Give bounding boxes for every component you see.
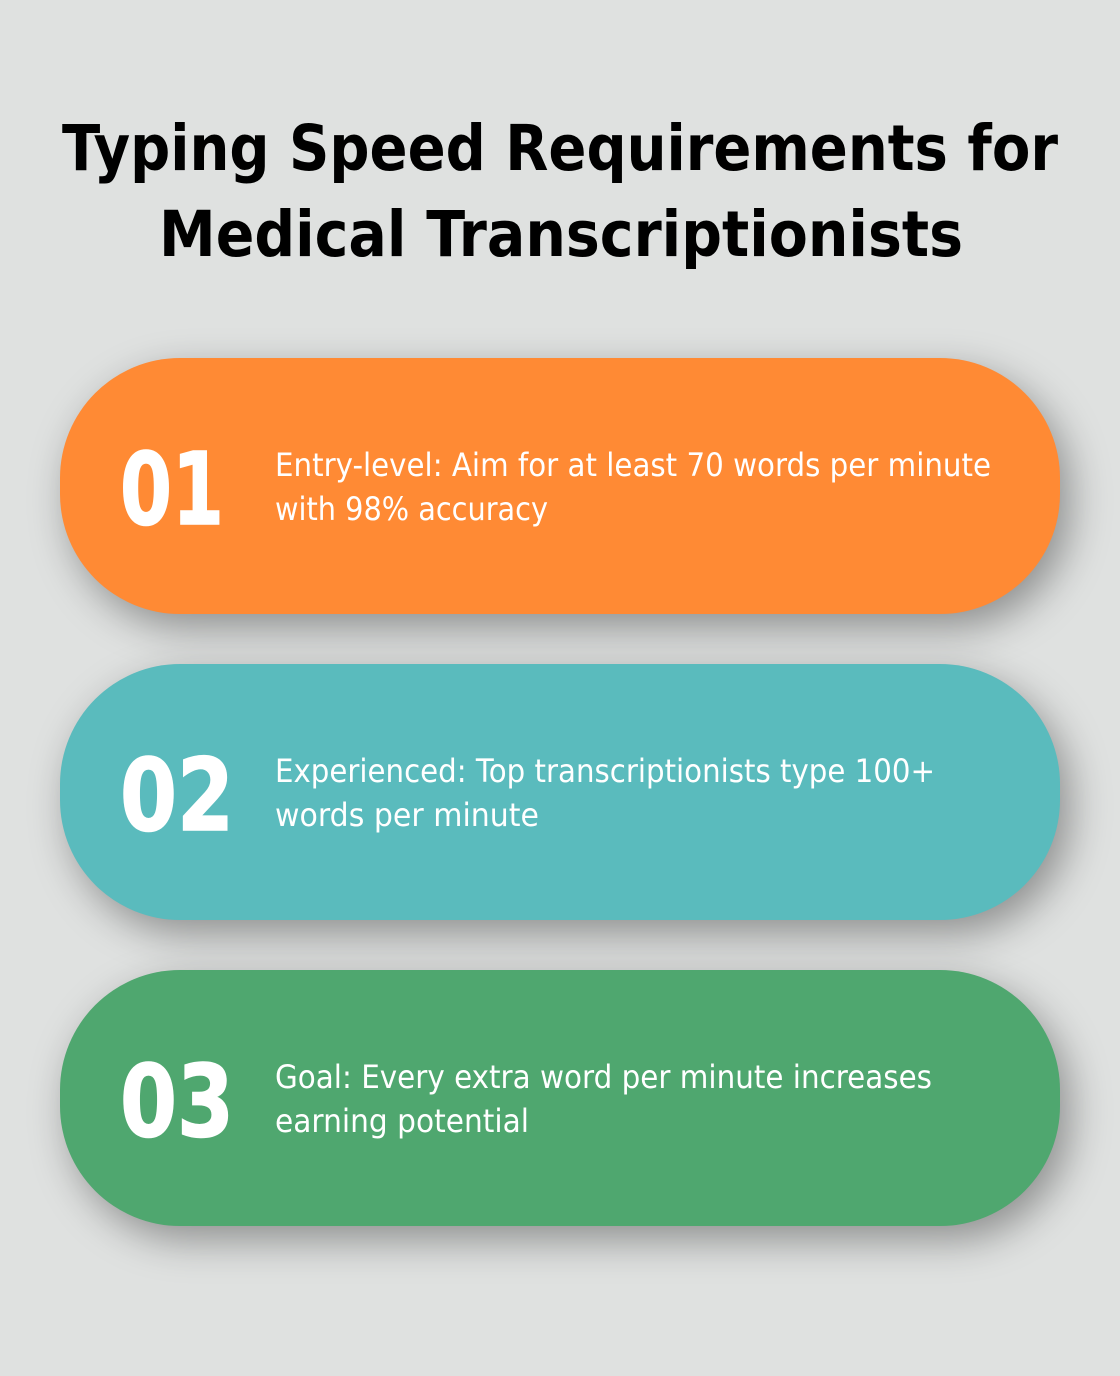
description 02 (275, 752, 935, 834)
panel: card 02 background (60, 664, 1060, 920)
number 01: 01 (120, 431, 224, 548)
description 03: earning potential (275, 1102, 529, 1140)
card 01 content (120, 431, 991, 548)
description 01 (275, 446, 991, 528)
number 03: 03 (120, 1043, 234, 1160)
panel: card 01 background (60, 358, 1060, 614)
title: Medical Transcriptionists (159, 198, 963, 271)
title (62, 112, 1058, 271)
card 02 content (120, 737, 935, 854)
description 02: words per minute (275, 796, 539, 834)
panel: card 03 background (60, 970, 1060, 1226)
description 03: Goal: Every extra word per minute increases (275, 1058, 932, 1096)
description 01: Entry-level: Aim for at least 70 words per minute (275, 446, 991, 484)
description 01: with 98% accuracy (275, 490, 548, 528)
number 02: 02 (120, 737, 234, 854)
description 03 (275, 1058, 932, 1140)
card 03 content (120, 1043, 932, 1160)
description 02: Experienced: Top transcriptionists type 100+ (275, 752, 935, 790)
